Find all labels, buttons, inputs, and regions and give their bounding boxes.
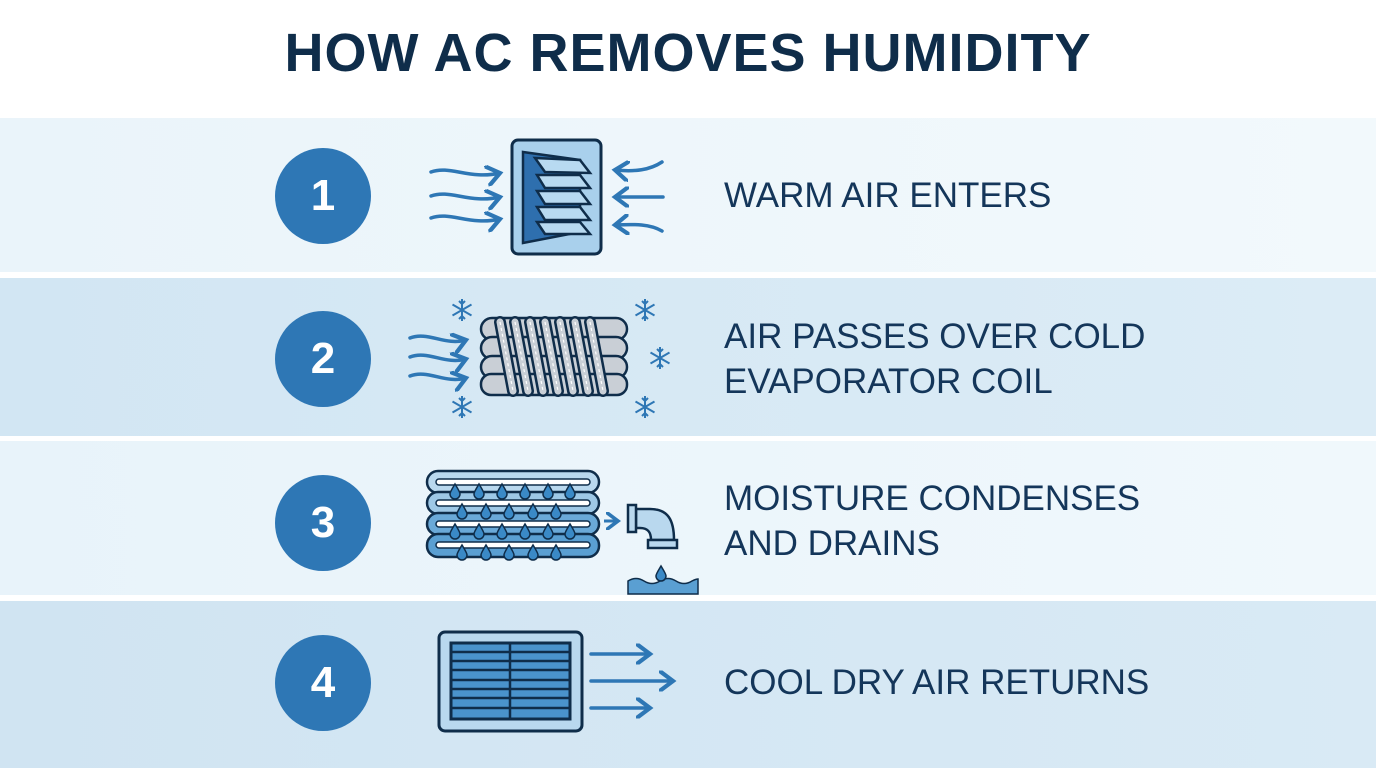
icon: air entering vent xyxy=(431,140,663,254)
icon: cold evaporator coil xyxy=(410,299,670,418)
step 2 number: 2 xyxy=(311,334,335,383)
panel: step 3 xyxy=(0,441,1376,595)
panel: step 1 xyxy=(0,118,1376,272)
step 4 number: 4 xyxy=(311,658,335,707)
step 4 number xyxy=(275,635,371,731)
step 3 text: MOISTURE CONDENSES xyxy=(724,479,1140,518)
step 3 text: AND DRAINS xyxy=(724,524,940,563)
step 2 text xyxy=(724,317,1145,401)
step 3 number: 3 xyxy=(311,498,335,547)
step 1 number xyxy=(275,148,371,244)
step 2 number xyxy=(275,311,371,407)
step 3 number xyxy=(275,475,371,571)
icon: grille with cool air out xyxy=(439,632,673,731)
step 4 text: COOL DRY AIR RETURNS xyxy=(724,663,1149,702)
step 1 number: 1 xyxy=(311,171,335,220)
step 1 text: WARM AIR ENTERS xyxy=(724,176,1051,215)
step 2 text: AIR PASSES OVER COLD xyxy=(724,317,1145,356)
icon: condensing coil and drain xyxy=(427,471,698,594)
step 3 text xyxy=(724,479,1140,563)
panel: step 2 xyxy=(0,278,1376,436)
panel: step 4 xyxy=(0,601,1376,768)
title: HOW AC REMOVES HUMIDITY xyxy=(284,23,1092,83)
step 2 text: EVAPORATOR COIL xyxy=(724,362,1053,401)
